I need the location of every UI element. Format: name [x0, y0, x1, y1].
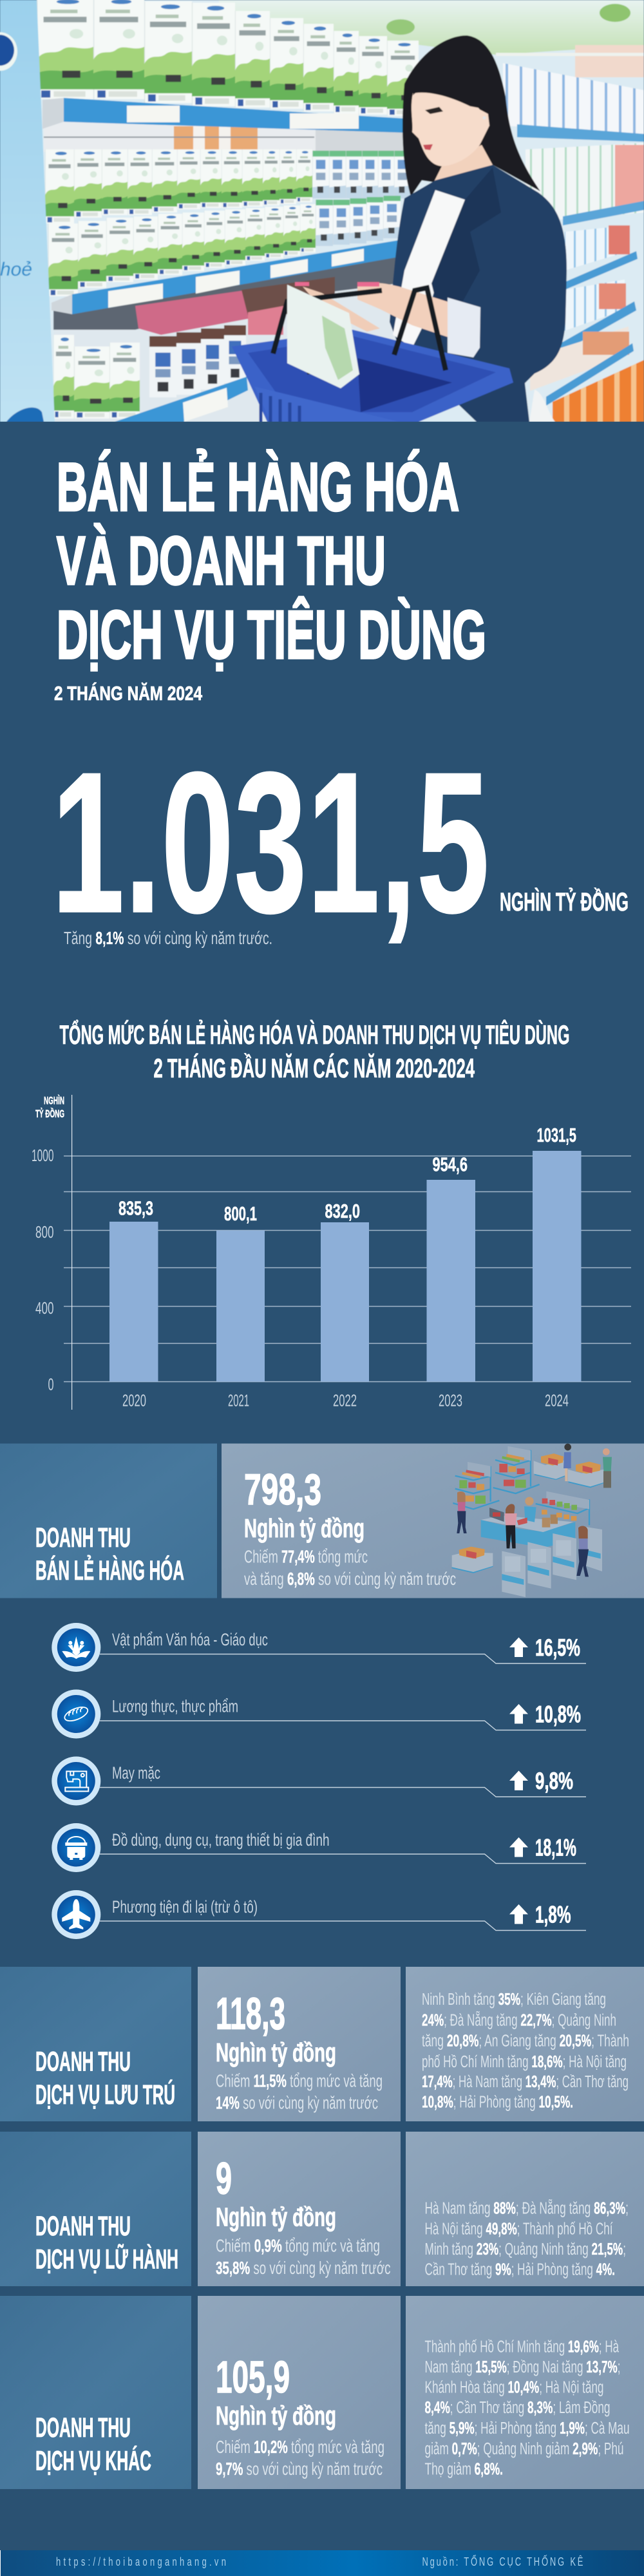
panel row: accommodation services: 24%; Đà Nẵng tăng 22,7%; Quảng Ninh — [422, 2011, 616, 2030]
panel: retail revenue figure: Chiếm 77,4% tổng mức — [244, 1547, 368, 1566]
title — [57, 450, 486, 673]
subtitle: period: 2 THÁNG NĂM 2024 — [54, 682, 203, 705]
panel row: accommodation services: tăng 20,8%; An Giang tăng 20,5%; Thành — [422, 2032, 629, 2050]
illustration: store scene — [452, 1444, 612, 1597]
panel row: other services: Chiếm 10,2% tổng mức và tăng — [216, 2437, 384, 2457]
bar chart: 2024 — [545, 1391, 569, 1410]
panel: retail revenue heading: DOANH THU — [35, 1522, 131, 1553]
panel row: other services: DỊCH VỤ KHÁC — [35, 2446, 151, 2477]
panel: retail revenue heading: BÁN LẺ HÀNG HÓA — [35, 1555, 184, 1586]
footer bar: https://thoibaonganhang.vn — [56, 2556, 226, 2569]
panel row: accommodation services: DOANH THU — [35, 2047, 131, 2078]
panel row: travel services: Minh tăng 23%; Quảng Ninh tăng 21,5%; — [425, 2240, 626, 2259]
panel row: accommodation services: Chiếm 11,5% tổng mức và tăng — [216, 2071, 383, 2090]
item: apparel: May mặc — [112, 1763, 160, 1783]
panel: retail revenue figure: 798,3 — [244, 1465, 321, 1514]
panel row: other services: 8,4%; Cần Thơ tăng 8,3%; Lâm Đồng — [425, 2399, 611, 2417]
panel row: other services: Khánh Hòa tăng 10,4%; Hà Nội tăng — [425, 2379, 604, 2397]
bar chart: 800 — [35, 1222, 54, 1242]
bar chart: 832,0 — [325, 1200, 360, 1222]
item: vehicles: Phương tiện đi lại (trừ ô tô) — [112, 1897, 258, 1917]
item: food: 10,8% — [535, 1701, 581, 1727]
panel row: travel services: 35,8% so với cùng kỳ năm trước — [216, 2258, 390, 2278]
bar chart: TỶ ĐỒNG — [35, 1108, 64, 1120]
item: apparel — [52, 1757, 586, 1806]
panel row: travel services: Hà Nam tăng 88%; Đà Nẵng tăng 86,3%; — [425, 2199, 629, 2218]
item: culture and education — [52, 1623, 586, 1672]
footer bar: Nguồn: TỔNG CỤC THỐNG KÊ — [422, 2553, 583, 2569]
panel row: travel services: Chiếm 0,9% tổng mức và tăng — [216, 2236, 380, 2255]
item: household goods — [52, 1823, 586, 1872]
list: retail categories — [52, 1623, 586, 1939]
panel row: accommodation services: 14% so với cùng kỳ năm trước — [216, 2093, 378, 2112]
bar chart: 2021 — [228, 1391, 249, 1410]
panel row: travel services: DỊCH VỤ LỮ HÀNH — [35, 2244, 178, 2275]
bar chart: 2023 — [439, 1391, 462, 1410]
headline figure: Tăng 8,1% so với cùng kỳ năm trước. — [64, 928, 272, 948]
item: food — [52, 1690, 586, 1739]
panel row: other services: Thọ giảm 6,8%. — [425, 2460, 503, 2478]
title: VÀ DOANH THU — [57, 523, 386, 599]
item: household goods: Đồ dùng, dụng cụ, trang thiết bị gia đình — [112, 1830, 330, 1850]
panel row: accommodation services: Ninh Bình tăng 35%; Kiên Giang tăng — [422, 1991, 606, 2009]
item: food: Lương thực, thực phẩm — [112, 1696, 238, 1716]
panel row: other services: 9,7% so với cùng kỳ năm trước — [216, 2459, 383, 2479]
item: culture and education: 16,5% — [535, 1634, 580, 1661]
bar chart: 2022 — [333, 1391, 357, 1410]
photo: woman shopping for milk in a supermarket: hoẻ — [0, 259, 32, 280]
item: household goods: 18,1% — [535, 1834, 576, 1861]
panel row: travel services: DOANH THU — [35, 2211, 131, 2242]
panel: retail revenue figure — [222, 1444, 644, 1598]
panel row: travel services: Nghìn tỷ đồng — [216, 2202, 336, 2232]
bar chart — [32, 1095, 631, 1410]
panel row: other services: giảm 0,7%; Quảng Ninh giảm 2,9%; Phú — [425, 2440, 623, 2458]
bar chart: NGHÌN — [44, 1095, 64, 1106]
panel row: accommodation services — [0, 1967, 644, 2121]
panel row: other services: Nam tăng 15,5%; Đồng Nai tăng 13,7%; — [425, 2358, 621, 2376]
bar chart: 1000 — [32, 1146, 54, 1165]
bar chart: 400 — [35, 1298, 54, 1318]
panel row: travel services: Cần Thơ tăng 9%; Hải Phòng tăng 4%. — [425, 2260, 615, 2278]
panel row: other services: Nghìn tỷ đồng — [216, 2401, 336, 2430]
chart title — [59, 1018, 569, 1083]
panel row: accommodation services: DỊCH VỤ LƯU TRÚ — [35, 2079, 175, 2110]
bar chart: 954,6 — [433, 1153, 468, 1176]
item: vehicles — [52, 1890, 586, 1939]
panel row: accommodation services: 118,3 — [216, 1989, 285, 2039]
panel row: other services: DOANH THU — [35, 2412, 131, 2443]
photo: woman shopping for milk in a supermarket — [0, 0, 644, 422]
item: vehicles: 1,8% — [535, 1901, 571, 1928]
panel row: travel services: 9 — [216, 2154, 232, 2204]
bar chart: 800,1 — [224, 1202, 257, 1225]
panel row: accommodation services: Nghìn tỷ đồng — [216, 2038, 336, 2067]
item: apparel: 9,8% — [535, 1768, 573, 1794]
footer bar — [0, 2550, 644, 2576]
panel row: accommodation services: 10,8%; Hải Phòng tăng 10,5%. — [422, 2093, 573, 2111]
bar chart: 1031,5 — [537, 1124, 576, 1146]
item: culture and education: Vật phẩm Văn hóa - Giáo dục — [112, 1630, 268, 1649]
panel: retail revenue heading — [0, 1444, 217, 1598]
panel: retail revenue figure: và tăng 6,8% so với cùng kỳ năm trước — [244, 1569, 456, 1589]
panel row: other services: 105,9 — [216, 2352, 290, 2402]
panel row: other services — [0, 2296, 644, 2489]
panel row: travel services — [0, 2132, 644, 2286]
panel: retail revenue figure: Nghìn tỷ đồng — [244, 1513, 365, 1543]
bar chart: 0 — [48, 1374, 54, 1394]
bar chart: 835,3 — [118, 1197, 153, 1220]
bar chart: 2020 — [122, 1391, 146, 1410]
panel row: other services: Thành phố Hồ Chí Minh tăng 19,6%; Hà — [425, 2338, 620, 2356]
